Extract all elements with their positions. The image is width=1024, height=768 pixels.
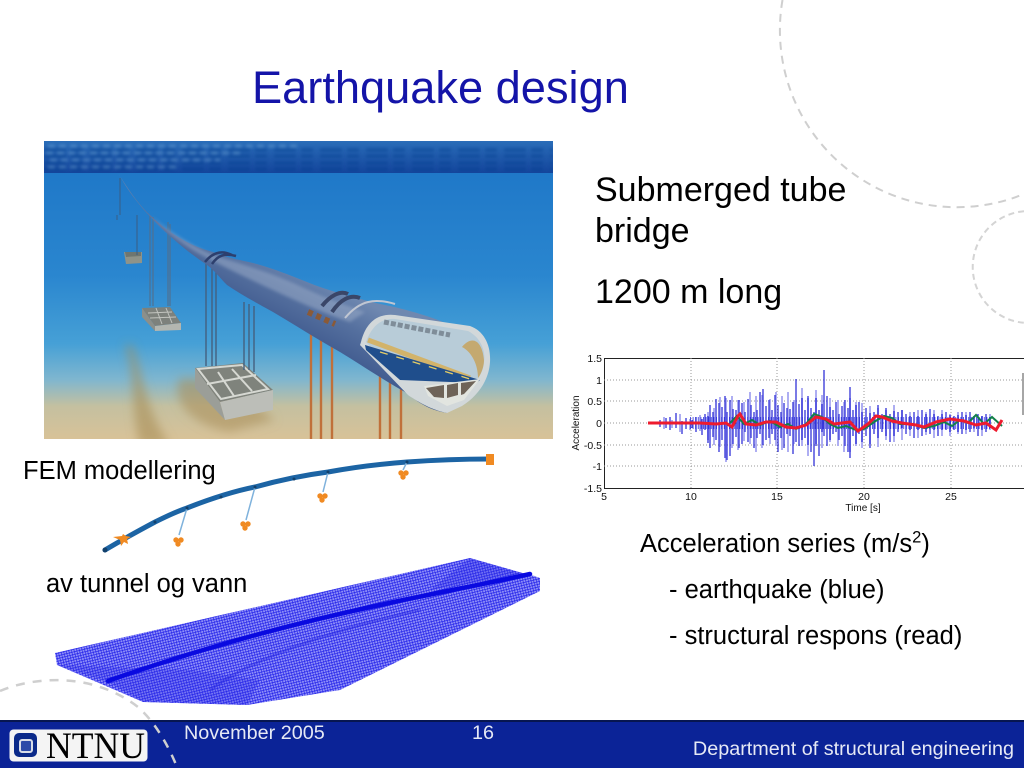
earthquake series light [664, 388, 990, 462]
tunnel collars [205, 252, 395, 324]
text: FEM modelling: FEM modellering [23, 457, 216, 485]
decorative dashed arc top right [780, 0, 1024, 207]
chart axis labels: 5 [601, 491, 607, 503]
chart axis labels: Acceleration [571, 395, 582, 451]
footer bar [0, 720, 1024, 768]
chart axis labels: -0.5 [584, 440, 602, 452]
title: Earthquake design [252, 62, 629, 113]
anchor block far [124, 252, 142, 264]
plot frame and grid [604, 358, 1024, 488]
text: structural response legend: - structural respons (read) [669, 622, 962, 650]
chart axis labels: 1.5 [587, 353, 602, 365]
text: tunnel and water: av tunnel og vann [46, 570, 247, 598]
chart axis labels: 20 [858, 491, 870, 503]
text: submerged tube bridge [595, 171, 846, 250]
tunnel tube [118, 173, 452, 413]
NTNU logo: NTNU [46, 726, 145, 767]
chart axis labels: 15 [771, 491, 783, 503]
chart axis labels: 0.5 [587, 396, 602, 408]
structural response green [730, 414, 1002, 430]
acceleration chart [571, 353, 1024, 514]
text: earthquake legend: - earthquake (blue) [669, 576, 884, 604]
chart axis labels: -1.5 [584, 483, 602, 495]
decorative dashed arc right [973, 211, 1024, 323]
tunnel cross-section [360, 315, 490, 413]
chart axis labels [571, 353, 957, 514]
FEM mesh of water volume [55, 558, 540, 705]
decorative dashed arc bottom left [0, 680, 177, 767]
chart axis labels: 0 [596, 418, 602, 430]
FEM beam model of tunnel [102, 454, 494, 552]
photo: submerged tube bridge illustration [44, 141, 553, 445]
seabed sand [125, 345, 275, 445]
tube highlight [150, 215, 365, 322]
text: submerged tube bridge: Submerged tube [595, 171, 846, 209]
dense centre of earthquake signal [690, 417, 990, 429]
chart axis labels: -1 [593, 461, 602, 473]
chart axis labels: 25 [945, 491, 957, 503]
structural response red [648, 414, 1002, 431]
footer slide number: 16 [472, 722, 494, 744]
text: length: 1200 m long [595, 273, 782, 311]
footer department: Department of structural engineering [693, 738, 1014, 760]
text: acceleration series heading: Acceleration series (m/s2) [640, 528, 930, 558]
chart axis labels: Time [s] [845, 503, 881, 514]
chart axis labels: 10 [685, 491, 697, 503]
anchor block middle [142, 307, 181, 331]
anchor block near [195, 363, 273, 420]
tethers [117, 178, 401, 439]
chart axis labels: 1 [596, 375, 602, 387]
earthquake series blue [660, 370, 990, 466]
text: submerged tube bridge: bridge [595, 212, 690, 250]
water surface band [44, 141, 553, 173]
footer date: November 2005 [184, 722, 325, 744]
